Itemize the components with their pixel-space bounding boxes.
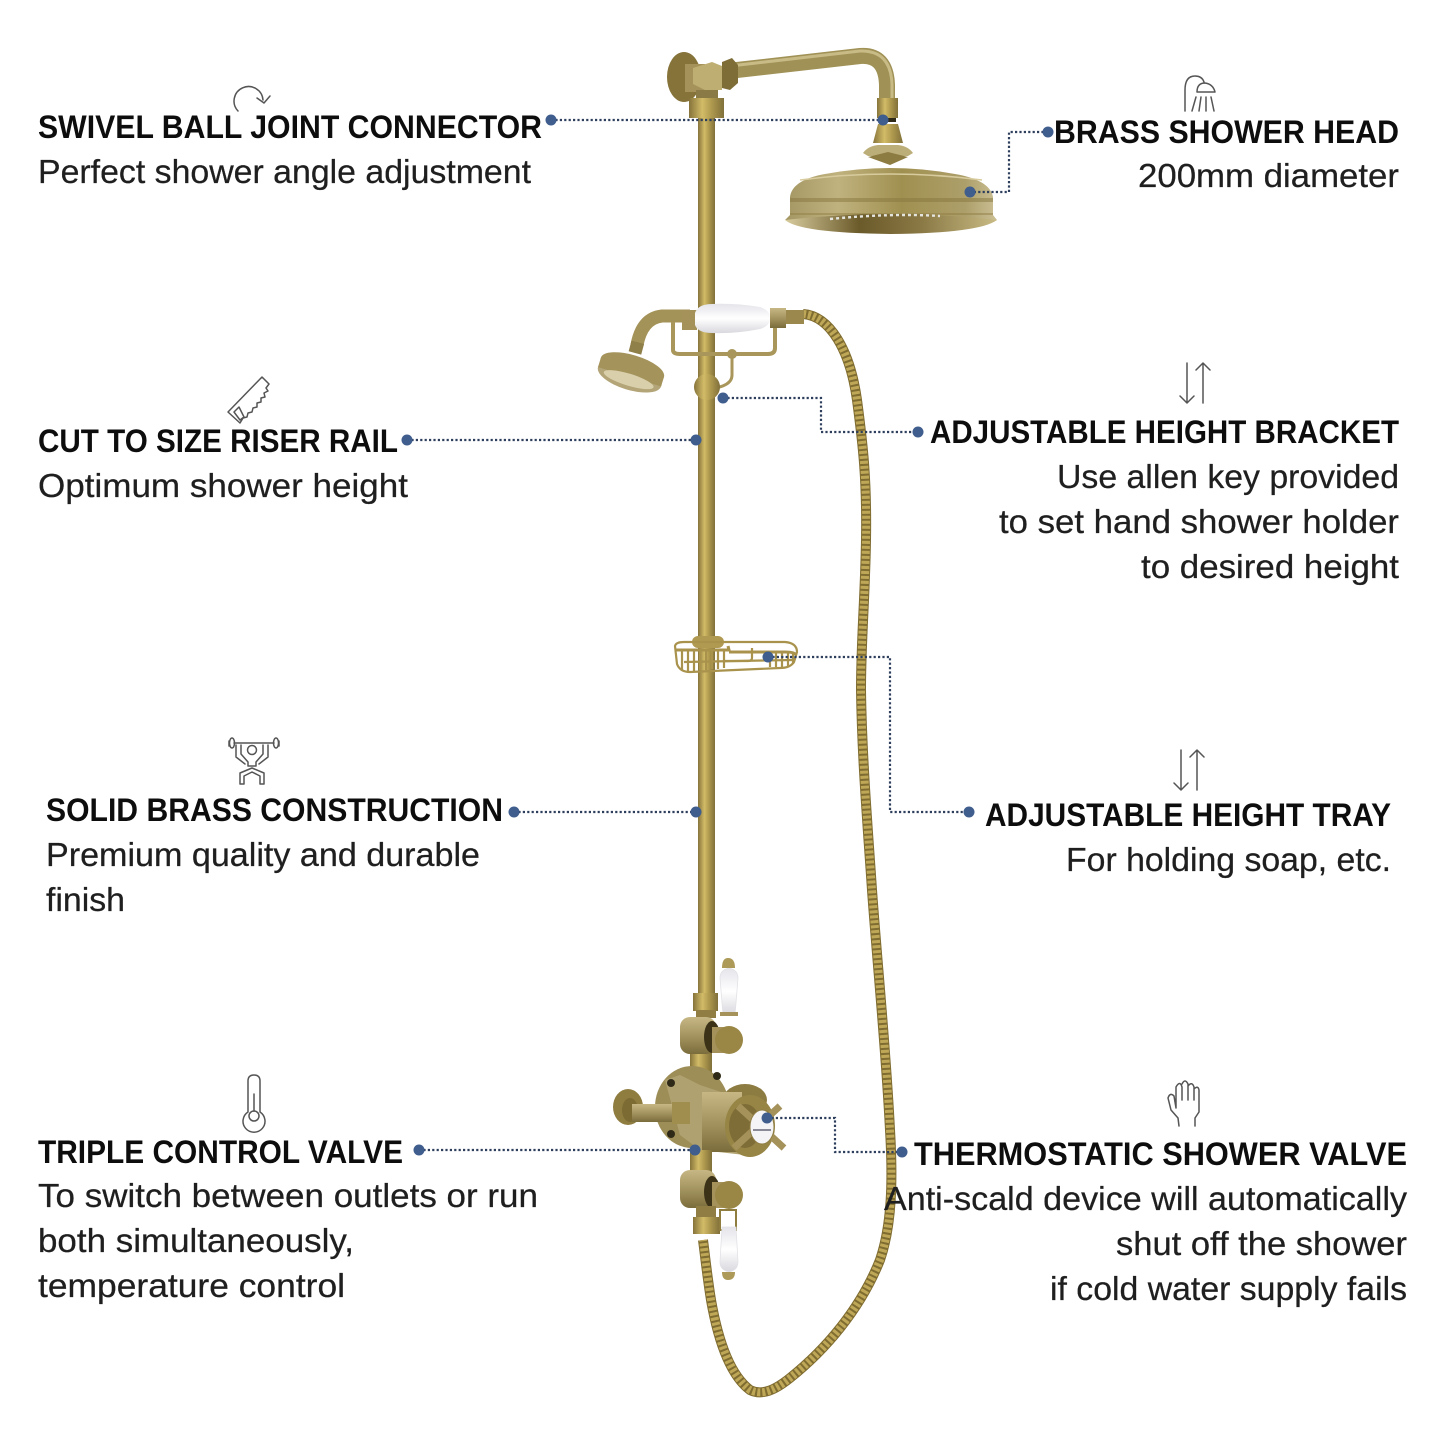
heading: adjustable height bracket: ADJUSTABLE HEIGHT BRACKET bbox=[930, 414, 1399, 450]
shower product illustration bbox=[594, 51, 997, 1392]
left elbow and flange bbox=[613, 1089, 643, 1125]
text block: triple valve description: To switch between outlets or run bbox=[38, 1177, 538, 1214]
cross handle bbox=[734, 1106, 784, 1148]
shower arm bbox=[728, 56, 887, 100]
hand shower bbox=[594, 304, 804, 400]
callout leader: brass shower head bbox=[964, 126, 1054, 198]
heading: adjustable height tray: ADJUSTABLE HEIGHT TRAY bbox=[985, 797, 1391, 833]
heading: swivel ball joint connector: SWIVEL BALL JOINT CONNECTOR bbox=[38, 109, 542, 145]
callout leader: height tray bbox=[762, 652, 974, 818]
text block: triple valve description bbox=[38, 1177, 538, 1304]
text: for holding soap: For holding soap, etc. bbox=[1066, 841, 1391, 878]
wall bracket bbox=[667, 52, 738, 118]
text block: bracket description: to set hand shower holder bbox=[999, 503, 1399, 540]
callout leader: riser rail bbox=[402, 434, 702, 446]
text block: brass description: Premium quality and durable bbox=[46, 836, 480, 873]
rain shower head bbox=[785, 98, 997, 234]
icon: saw bbox=[228, 377, 269, 423]
lower lever bbox=[720, 1210, 736, 1230]
heading: thermostatic shower valve: THERMOSTATIC SHOWER VALVE bbox=[914, 1136, 1407, 1172]
text block: bracket description: Use allen key provided bbox=[1057, 458, 1399, 495]
icon: hand bbox=[1168, 1081, 1199, 1126]
rear flange bbox=[723, 1084, 767, 1116]
text block: thermostatic description: if cold water supply fails bbox=[1050, 1270, 1407, 1307]
callout leader: triple control valve bbox=[414, 1144, 700, 1156]
lower cylinder bbox=[690, 1150, 712, 1175]
main body bbox=[655, 1066, 729, 1148]
text: optimum shower height: Optimum shower height bbox=[38, 467, 408, 504]
text block: triple valve description: temperature control bbox=[38, 1267, 345, 1304]
callout leader: swivel ball joint bbox=[546, 114, 888, 126]
icon: rotate arrow bbox=[234, 87, 270, 111]
callout leader: thermostatic valve bbox=[762, 1112, 908, 1158]
icon: weightlifter bbox=[229, 738, 279, 784]
text block: bracket description: to desired height bbox=[1141, 548, 1399, 585]
text block: thermostatic description: shut off the shower bbox=[1116, 1225, 1407, 1262]
soap tray bbox=[675, 636, 797, 672]
callout leader: solid brass bbox=[508, 806, 702, 818]
text: 200mm diameter: 200mm diameter bbox=[1138, 157, 1399, 194]
icon: thermometer bbox=[243, 1075, 265, 1132]
text block: brass description: finish bbox=[46, 881, 125, 918]
text block: triple valve description: both simultaneously, bbox=[38, 1222, 354, 1259]
text block: bracket description bbox=[999, 458, 1399, 585]
icon: arrows bracket bbox=[1180, 363, 1210, 403]
icon: shower bbox=[1185, 76, 1215, 111]
upper nut bbox=[693, 993, 718, 1011]
text block: thermostatic description: Anti-scald device will automatically bbox=[884, 1180, 1408, 1217]
riser rail bbox=[698, 118, 715, 998]
callout leader: height bracket bbox=[718, 392, 924, 438]
heading: triple control valve: TRIPLE CONTROL VALVE bbox=[38, 1134, 403, 1170]
text block: brass description bbox=[46, 836, 480, 918]
heading: brass shower head: BRASS SHOWER HEAD bbox=[1054, 114, 1399, 150]
upper lever bbox=[720, 968, 738, 1015]
heading: cut to size riser rail: CUT TO SIZE RISER RAIL bbox=[38, 423, 398, 459]
flexible hose bbox=[703, 314, 891, 1392]
icon: arrows tray bbox=[1174, 750, 1204, 790]
thermostatic valve bbox=[613, 958, 784, 1280]
text: perfect shower angle adjustment: Perfect shower angle adjustment bbox=[38, 153, 531, 190]
text block: thermostatic description bbox=[884, 1180, 1408, 1307]
heading: solid brass construction: SOLID BRASS CONSTRUCTION bbox=[46, 792, 503, 828]
